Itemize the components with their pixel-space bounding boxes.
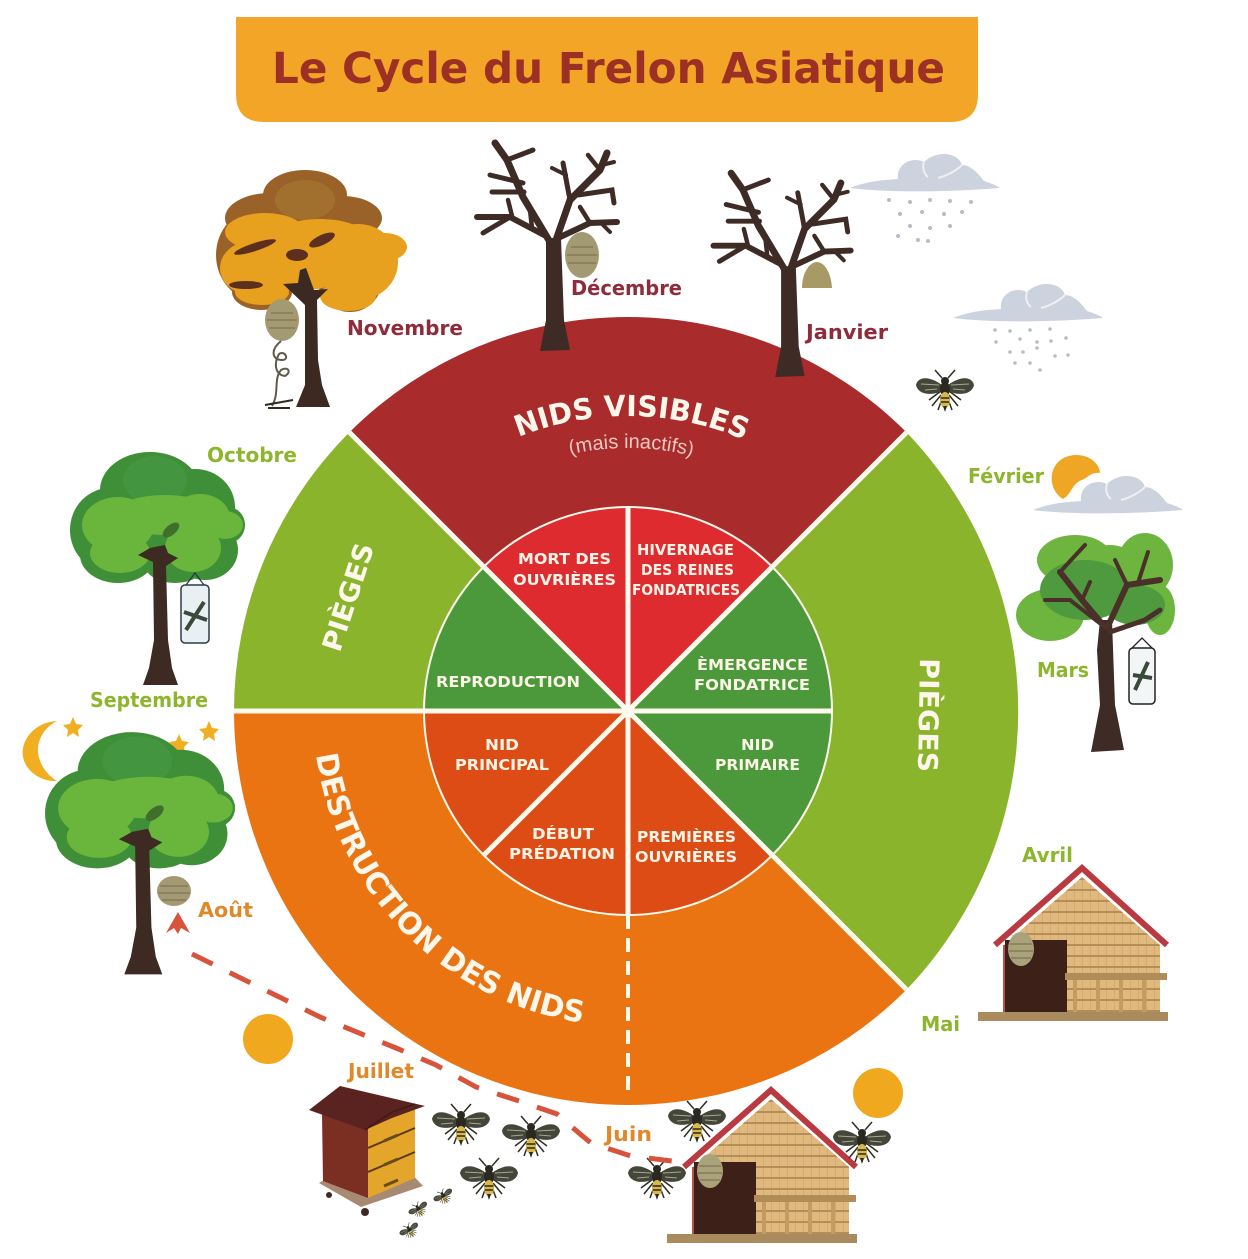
arrow head	[166, 912, 190, 934]
icon: sun juin	[853, 1068, 903, 1118]
label: juillet: Juillet	[346, 1059, 414, 1083]
heading: destruction des nids: DESTRUCTION DES NIDS	[316, 754, 583, 1022]
subheading: mais inactifs: (mais inactifs)	[570, 434, 693, 459]
heading: nids visibles: NIDS VISIBLES	[514, 394, 749, 438]
title: Le Cycle du Frelon Asiatique	[272, 44, 945, 94]
label: premières ouvrières: PREMIÈRES	[637, 827, 736, 846]
icon: shed juin	[667, 1090, 857, 1243]
nest	[157, 876, 191, 906]
label: mort des ouvrières: MORT DES	[518, 550, 611, 568]
label: avril: Avril	[1022, 843, 1073, 867]
label: mort des ouvrières: OUVRIÈRES	[513, 570, 616, 589]
flying hornets	[432, 1101, 891, 1200]
tree: mars	[1016, 533, 1175, 752]
label: émergence fondatrice	[694, 655, 810, 694]
label: émergence fondatrice: FONDATRICE	[694, 676, 810, 694]
heading: pièges left: PIÈGES	[316, 539, 381, 655]
trap	[1129, 638, 1155, 704]
panel: pièges right	[628, 432, 1018, 990]
tree: septembre	[45, 732, 235, 974]
label: hivernage des reines fondatrices	[632, 541, 740, 599]
label: nid principal: PRINCIPAL	[455, 756, 549, 774]
tree: octobre	[70, 452, 245, 685]
icon: beehive	[309, 1086, 425, 1216]
label: février: Février	[968, 464, 1044, 488]
panel: nids visibles	[349, 317, 907, 711]
label: début prédation	[509, 824, 615, 863]
label: premières ouvrières: OUVRIÈRES	[635, 847, 737, 866]
label: mort des ouvrières	[513, 550, 616, 589]
label: hivernage des reines fondatrices: FONDATRICES	[632, 581, 740, 599]
label: août: Août	[198, 898, 253, 922]
label: début prédation: DÉBUT	[532, 824, 594, 843]
trap	[181, 573, 209, 643]
label: juin: Juin	[603, 1122, 652, 1146]
label: nid primaire: PRIMAIRE	[715, 756, 800, 774]
icon: hornet	[916, 370, 974, 412]
label: début prédation: PRÉDATION	[509, 844, 615, 863]
label: mai: Mai	[921, 1012, 960, 1036]
label: nid primaire	[715, 736, 800, 774]
icon: shed avril	[978, 868, 1168, 1021]
weather: rain cloud	[953, 284, 1103, 372]
icon: sun juillet	[243, 1014, 293, 1064]
label: mars: Mars	[1037, 658, 1089, 682]
tree: décembre	[477, 143, 617, 351]
tree: janvier	[713, 173, 851, 377]
cycle wheel	[234, 317, 1018, 1105]
nest	[265, 299, 299, 341]
inner circle	[423, 506, 833, 916]
weather: snow cloud	[850, 154, 1000, 243]
label: janvier: Janvier	[804, 320, 888, 344]
label: nid primaire: NID	[741, 736, 774, 754]
tree: novembre	[216, 170, 407, 408]
nest	[565, 232, 599, 278]
heading: pièges right: PIÈGES	[911, 658, 945, 772]
icon: sun with cloud	[1033, 455, 1183, 513]
label: premières ouvrières	[635, 827, 737, 866]
panel: destruction des nids	[234, 711, 907, 1105]
label: nid principal: NID	[485, 736, 519, 754]
panel: pièges left	[234, 432, 628, 711]
label: reproduction: REPRODUCTION	[436, 673, 580, 691]
dashed flight path arrow	[166, 912, 672, 1161]
label: nid principal	[455, 736, 549, 774]
label: hivernage des reines fondatrices: HIVERNAGE	[637, 541, 734, 559]
label: septembre: Septembre	[90, 688, 208, 712]
title banner	[236, 17, 978, 122]
icon: moon	[23, 721, 57, 781]
label: novembre: Novembre	[347, 316, 463, 340]
label: décembre: Décembre	[571, 276, 682, 300]
icon: stars	[63, 717, 219, 754]
label: hivernage des reines fondatrices: DES REINES	[641, 561, 734, 579]
label: émergence fondatrice: ÈMERGENCE	[697, 655, 808, 674]
small hornets	[397, 1185, 457, 1242]
dotted separator	[626, 915, 630, 1096]
nest	[802, 262, 832, 288]
label: octobre: Octobre	[207, 443, 297, 467]
